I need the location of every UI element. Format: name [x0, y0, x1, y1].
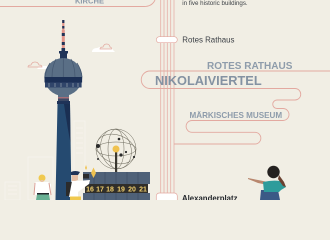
icon: cloud left	[28, 62, 56, 69]
route path: winding sights	[141, 71, 330, 144]
icon: sparkle	[85, 165, 96, 178]
route lines	[161, 0, 174, 196]
stop label: Rotes Rathaus: Rotes Rathaus	[182, 36, 235, 44]
heading: Rotes Rathaus: ROTES RATHAUS	[207, 61, 293, 72]
illustration: World Clock: 18	[106, 186, 114, 194]
body text: historic buildings: in five historic buildings.	[182, 0, 248, 7]
illustration: World Clock: 17	[96, 186, 104, 194]
heading: Nikolaiviertel: NIKOLAIVIERTEL	[155, 73, 262, 88]
illustration: person with cap and camera	[66, 171, 90, 200]
illustration: person pointing	[248, 166, 286, 200]
heading: Märkisches Museum: MÄRKISCHES MUSEUM	[190, 111, 282, 120]
illustration: World Clock: 19	[117, 186, 125, 194]
route path: Kirche loop	[0, 0, 155, 6]
illustration: World Clock	[83, 126, 150, 200]
stop marker: Alexanderplatz	[156, 193, 177, 205]
illustration: World Clock: 21	[139, 186, 147, 194]
illustration: World Clock: 16	[86, 186, 94, 194]
stop marker: Rotes Rathaus	[156, 37, 177, 43]
illustration: person with blonde hair	[34, 174, 51, 200]
illustration: TV tower	[44, 20, 82, 200]
icon: cloud right	[92, 44, 115, 52]
illustration: World Clock: 20	[128, 186, 136, 194]
